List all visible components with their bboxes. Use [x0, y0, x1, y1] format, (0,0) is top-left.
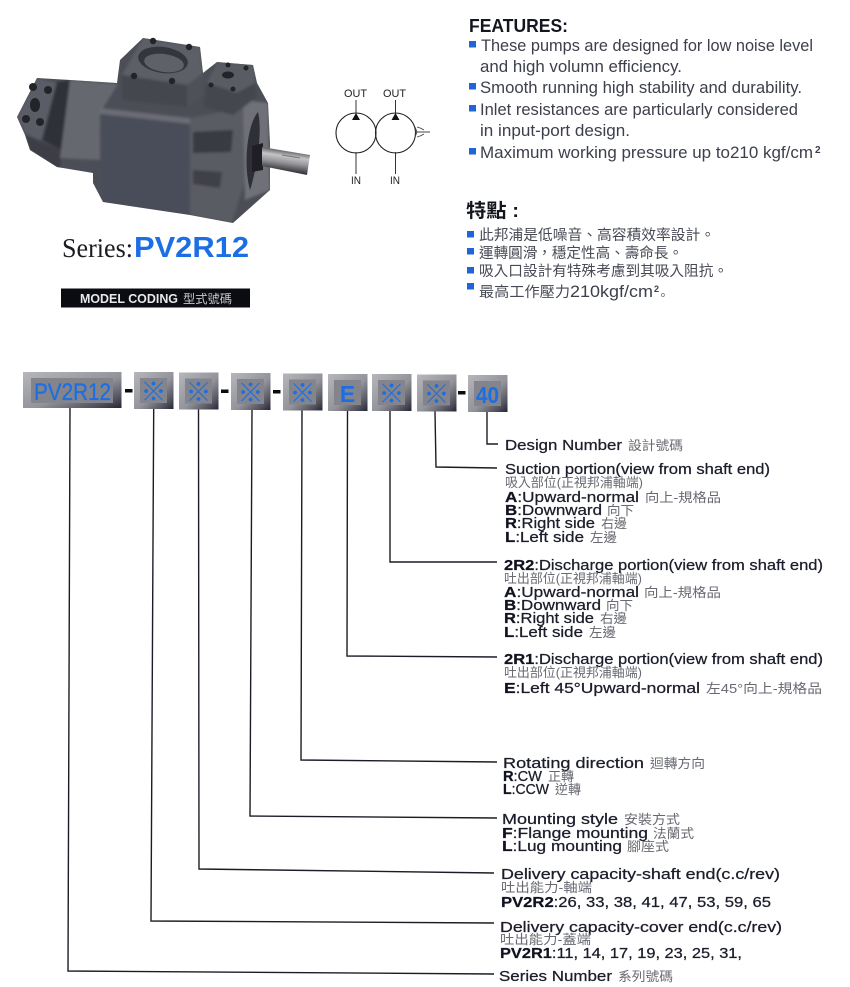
end plate: [247, 112, 260, 190]
panel: features: 2: [815, 145, 821, 156]
panel: features: These pumps are designed for low noise level: [481, 37, 813, 55]
code box: 2R2 discharge: [372, 374, 412, 411]
legend: rotating direction: Rotating direction: [503, 756, 644, 772]
legend: design number: Design Number: [505, 438, 622, 454]
legend: delivery capacity shaft end: PV2R2 :26, 33, 38, 41, 47, 53, 59, 65: [501, 895, 771, 911]
legend: suction portion: B:Downward: [505, 503, 602, 519]
panel: features: in input-port design.: [480, 122, 630, 140]
panel: features in Chinese: 吸入口設計有特殊考慮到其吸入阻抗。: [479, 263, 728, 280]
legend: 2R2 discharge portion: 吐出部位(正視邦浦軸端): [504, 571, 642, 586]
icon: hydraulic double pump symbol: OUT: [383, 88, 406, 100]
legend: suction portion: [505, 462, 770, 546]
legend: rotating direction: 逆轉: [555, 782, 581, 797]
legend: series number: [499, 969, 673, 985]
title: series name: PV2R12: [134, 232, 249, 264]
legend: suction portion: Suction portion(view from shaft end): [505, 462, 770, 478]
heading: features in Chinese: 特點 :: [466, 200, 519, 222]
legend: suction portion: 左邊: [590, 530, 617, 545]
code box: suction: [417, 374, 456, 412]
panel: features in Chinese: 此邦浦是低噪音、高容積效率設計。: [479, 227, 715, 244]
panel: features in Chinese: 運轉圓滑，穩定性高、壽命長。: [479, 244, 683, 262]
legend: series number: Series Number: [499, 969, 612, 985]
panel: features in Chinese: 最高工作壓力: [479, 284, 570, 301]
legend: suction portion: 吸入部位(正視邦浦軸端): [505, 475, 643, 490]
legend: 2R2 discharge portion: L:Left side: [504, 625, 583, 641]
code box: cover end capacity: ※: [140, 377, 167, 407]
legend: 2R2 discharge portion: 右邊: [600, 611, 627, 626]
icon: hydraulic double pump symbol: IN: [390, 175, 400, 187]
heading: model coding bar: 型式號碼: [183, 292, 232, 306]
connector lines: [68, 408, 498, 974]
legend: suction portion: 向下: [607, 503, 634, 518]
panel: features: and high volumn efficiency.: [480, 58, 682, 76]
legend: delivery capacity shaft end: Delivery capacity-shaft end(c.c/rev): [501, 867, 780, 883]
legend: mounting style: Mounting style: [502, 812, 618, 828]
panel: features in Chinese: 2: [654, 284, 659, 294]
legend: 2R1 discharge portion: 左45°向上-規格品: [706, 681, 822, 696]
code box: 2R2 discharge: ※: [378, 379, 405, 409]
legend: 2R1 discharge portion: 吐出部位(正視邦浦軸端): [504, 665, 642, 680]
code box: shaft end capacity: [179, 372, 218, 410]
code box: PV2R12: PV2R12: [34, 379, 111, 406]
code box: suction: ※: [423, 380, 450, 410]
legend: 2R2 discharge portion: B:Downward: [504, 598, 601, 614]
icon: hydraulic pump photo: [10, 30, 310, 230]
legend: mounting style: [502, 812, 694, 855]
legend: suction portion: L:Left side: [505, 530, 584, 546]
legend: delivery capacity cover end: [500, 920, 782, 962]
legend: series number: 系列號碼: [618, 969, 673, 984]
legend: rotating direction: L:CCW: [503, 782, 549, 798]
legend: rotating direction: 迴轉方向: [650, 756, 705, 771]
legend: rotating direction: [503, 756, 705, 798]
legend: suction portion: 右邊: [601, 516, 627, 531]
icon: hydraulic double pump symbol: OUT: [344, 88, 367, 100]
title: series name: [62, 232, 249, 264]
panel: features: Maximum working pressure up to210 kgf/cm: [480, 144, 813, 162]
legend: delivery capacity shaft end: 吐出能力-軸端: [501, 880, 592, 895]
legend: 2R2 discharge portion: [504, 558, 823, 641]
legend: 2R1 discharge portion: [504, 652, 823, 697]
code box: 40: [468, 375, 508, 412]
icon: hydraulic double pump symbol: [336, 88, 430, 187]
panel: features: Smooth running high stability and durability.: [480, 79, 802, 97]
title: series name: Series:: [62, 233, 133, 263]
legend: mounting style: 腳座式: [627, 839, 669, 854]
legend: 2R2 discharge portion: 向上-規格品: [644, 585, 721, 600]
legend: suction portion: A:Upward-normal: [505, 490, 639, 506]
panel: features: [469, 15, 821, 162]
legend: 2R2 discharge portion: R:Right side: [504, 611, 594, 627]
legend: rotating direction: R:CW: [503, 769, 542, 785]
legend: mounting style: 法蘭式: [653, 826, 694, 841]
panel: features: Inlet resistances are particularly considered: [480, 101, 798, 119]
code box: E: E: [340, 381, 355, 407]
code box: shaft end capacity: ※: [185, 378, 212, 408]
heading: features: FEATURES:: [469, 15, 568, 36]
heading: model coding bar: [61, 288, 250, 308]
legend: 2R2 discharge portion: 左邊: [589, 625, 616, 640]
model code row: [23, 372, 508, 412]
port flange: [136, 44, 190, 76]
legend: mounting style: 安裝方式: [624, 812, 680, 827]
panel: features in Chinese: o: [661, 292, 665, 299]
legend: delivery capacity cover end: 吐出能力-蓋端: [500, 932, 591, 947]
legend: delivery capacity cover end: PV2R1 :11, 14, 17, 19, 23, 25, 31,: [500, 946, 742, 962]
legend: suction portion: 向上-規格品: [645, 490, 721, 505]
legend: mounting style: L:Lug mounting: [502, 839, 622, 855]
code box: PV2R12: [23, 372, 122, 408]
code box: cover end capacity: [134, 372, 174, 409]
heading: model coding bar: MODEL CODING: [80, 291, 178, 306]
shaft: [252, 143, 310, 175]
legend: 2R1 discharge portion: E:Left 45°Upward-normal: [504, 681, 700, 697]
legend: mounting style: F:Flange mounting: [502, 826, 648, 842]
icon: hydraulic double pump symbol: IN: [351, 175, 361, 187]
code box: 40: 40: [476, 382, 499, 408]
code box: mounting style: ※: [237, 378, 264, 408]
panel: features in Chinese: [466, 200, 728, 301]
legend: 2R2 discharge portion: 2R2 :Discharge portion(view from shaft end): [504, 558, 823, 574]
code box: mounting style: [231, 373, 270, 410]
code box: rotating direction: [283, 374, 322, 410]
code box: rotating direction: ※: [289, 378, 316, 408]
legend: 2R2 discharge portion: A:Upward-normal: [504, 585, 639, 601]
legend: rotating direction: 正轉: [548, 769, 574, 784]
legend: delivery capacity cover end: Delivery capacity-cover end(c.c/rev): [500, 920, 782, 936]
legend: design number: [505, 438, 683, 454]
legend: suction portion: R:Right side: [505, 516, 595, 532]
legend: delivery capacity shaft end: [501, 867, 780, 911]
legend: design number: 設計號碼: [628, 438, 683, 453]
legend: 2R1 discharge portion: 2R1 :Discharge portion(view from shaft end): [504, 652, 823, 668]
legend: 2R2 discharge portion: 向下: [606, 598, 633, 613]
panel: features in Chinese: 210kgf/cm: [570, 283, 653, 301]
code box: E: [328, 374, 368, 411]
